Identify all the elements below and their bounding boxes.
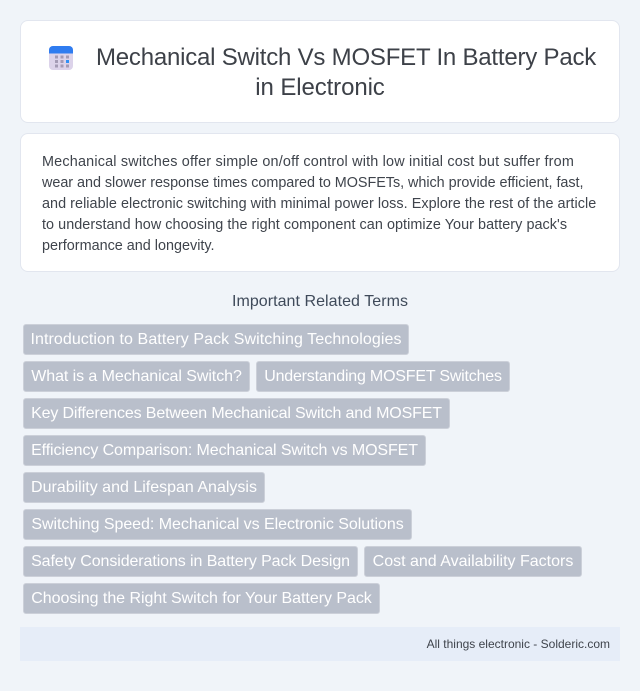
tag: Understanding MOSFET Switches — [264, 368, 502, 385]
tag: Cost and Availability Factors — [373, 553, 573, 570]
tag — [256, 361, 510, 392]
title — [96, 44, 596, 101]
tag — [23, 509, 412, 540]
summary paragraph: wear and slower response times compared to MOSFETs, which provide efficient, fast, — [42, 175, 583, 191]
tag — [364, 546, 582, 577]
tag list — [23, 324, 582, 614]
footer credit: All things electronic - Solderic.com — [427, 637, 610, 651]
summary paragraph: to understand how choosing the right component can optimize Your battery pack's — [42, 217, 567, 233]
tag: Safety Considerations in Battery Pack Design — [31, 553, 350, 570]
tag: Switching Speed: Mechanical vs Electronic Solutions — [31, 516, 404, 533]
summary paragraph — [42, 154, 596, 254]
tag — [23, 435, 426, 466]
tag — [23, 546, 358, 577]
panel: title card — [20, 20, 620, 123]
tag: Choosing the Right Switch for Your Battery Pack — [31, 590, 372, 607]
tag: Durability and Lifespan Analysis — [31, 479, 257, 496]
icon: calendar grid — [49, 46, 73, 70]
summary paragraph: Mechanical switches offer simple on/off control with low initial cost but suffer from — [42, 154, 574, 170]
summary paragraph: and reliable electronic switching with minimal power loss. Explore the rest of the article — [42, 196, 596, 212]
tag: Introduction to Battery Pack Switching Technologies — [30, 331, 402, 348]
panel: summary text — [20, 133, 620, 272]
summary paragraph: performance and longevity. — [42, 238, 215, 254]
tag: What is a Mechanical Switch? — [31, 368, 242, 385]
tag: Efficiency Comparison: Mechanical Switch vs MOSFET — [31, 442, 418, 459]
heading: important related terms: Important Related Terms — [232, 293, 408, 310]
tag: Key Differences Between Mechanical Switch and MOSFET — [31, 405, 442, 422]
tag — [23, 398, 450, 429]
tag — [23, 361, 250, 392]
tag — [23, 472, 265, 503]
tag — [23, 324, 409, 355]
title: Mechanical Switch Vs MOSFET In Battery Pack — [96, 44, 596, 71]
tag — [23, 583, 380, 614]
title: in Electronic — [255, 74, 385, 101]
footer bar — [20, 627, 620, 661]
